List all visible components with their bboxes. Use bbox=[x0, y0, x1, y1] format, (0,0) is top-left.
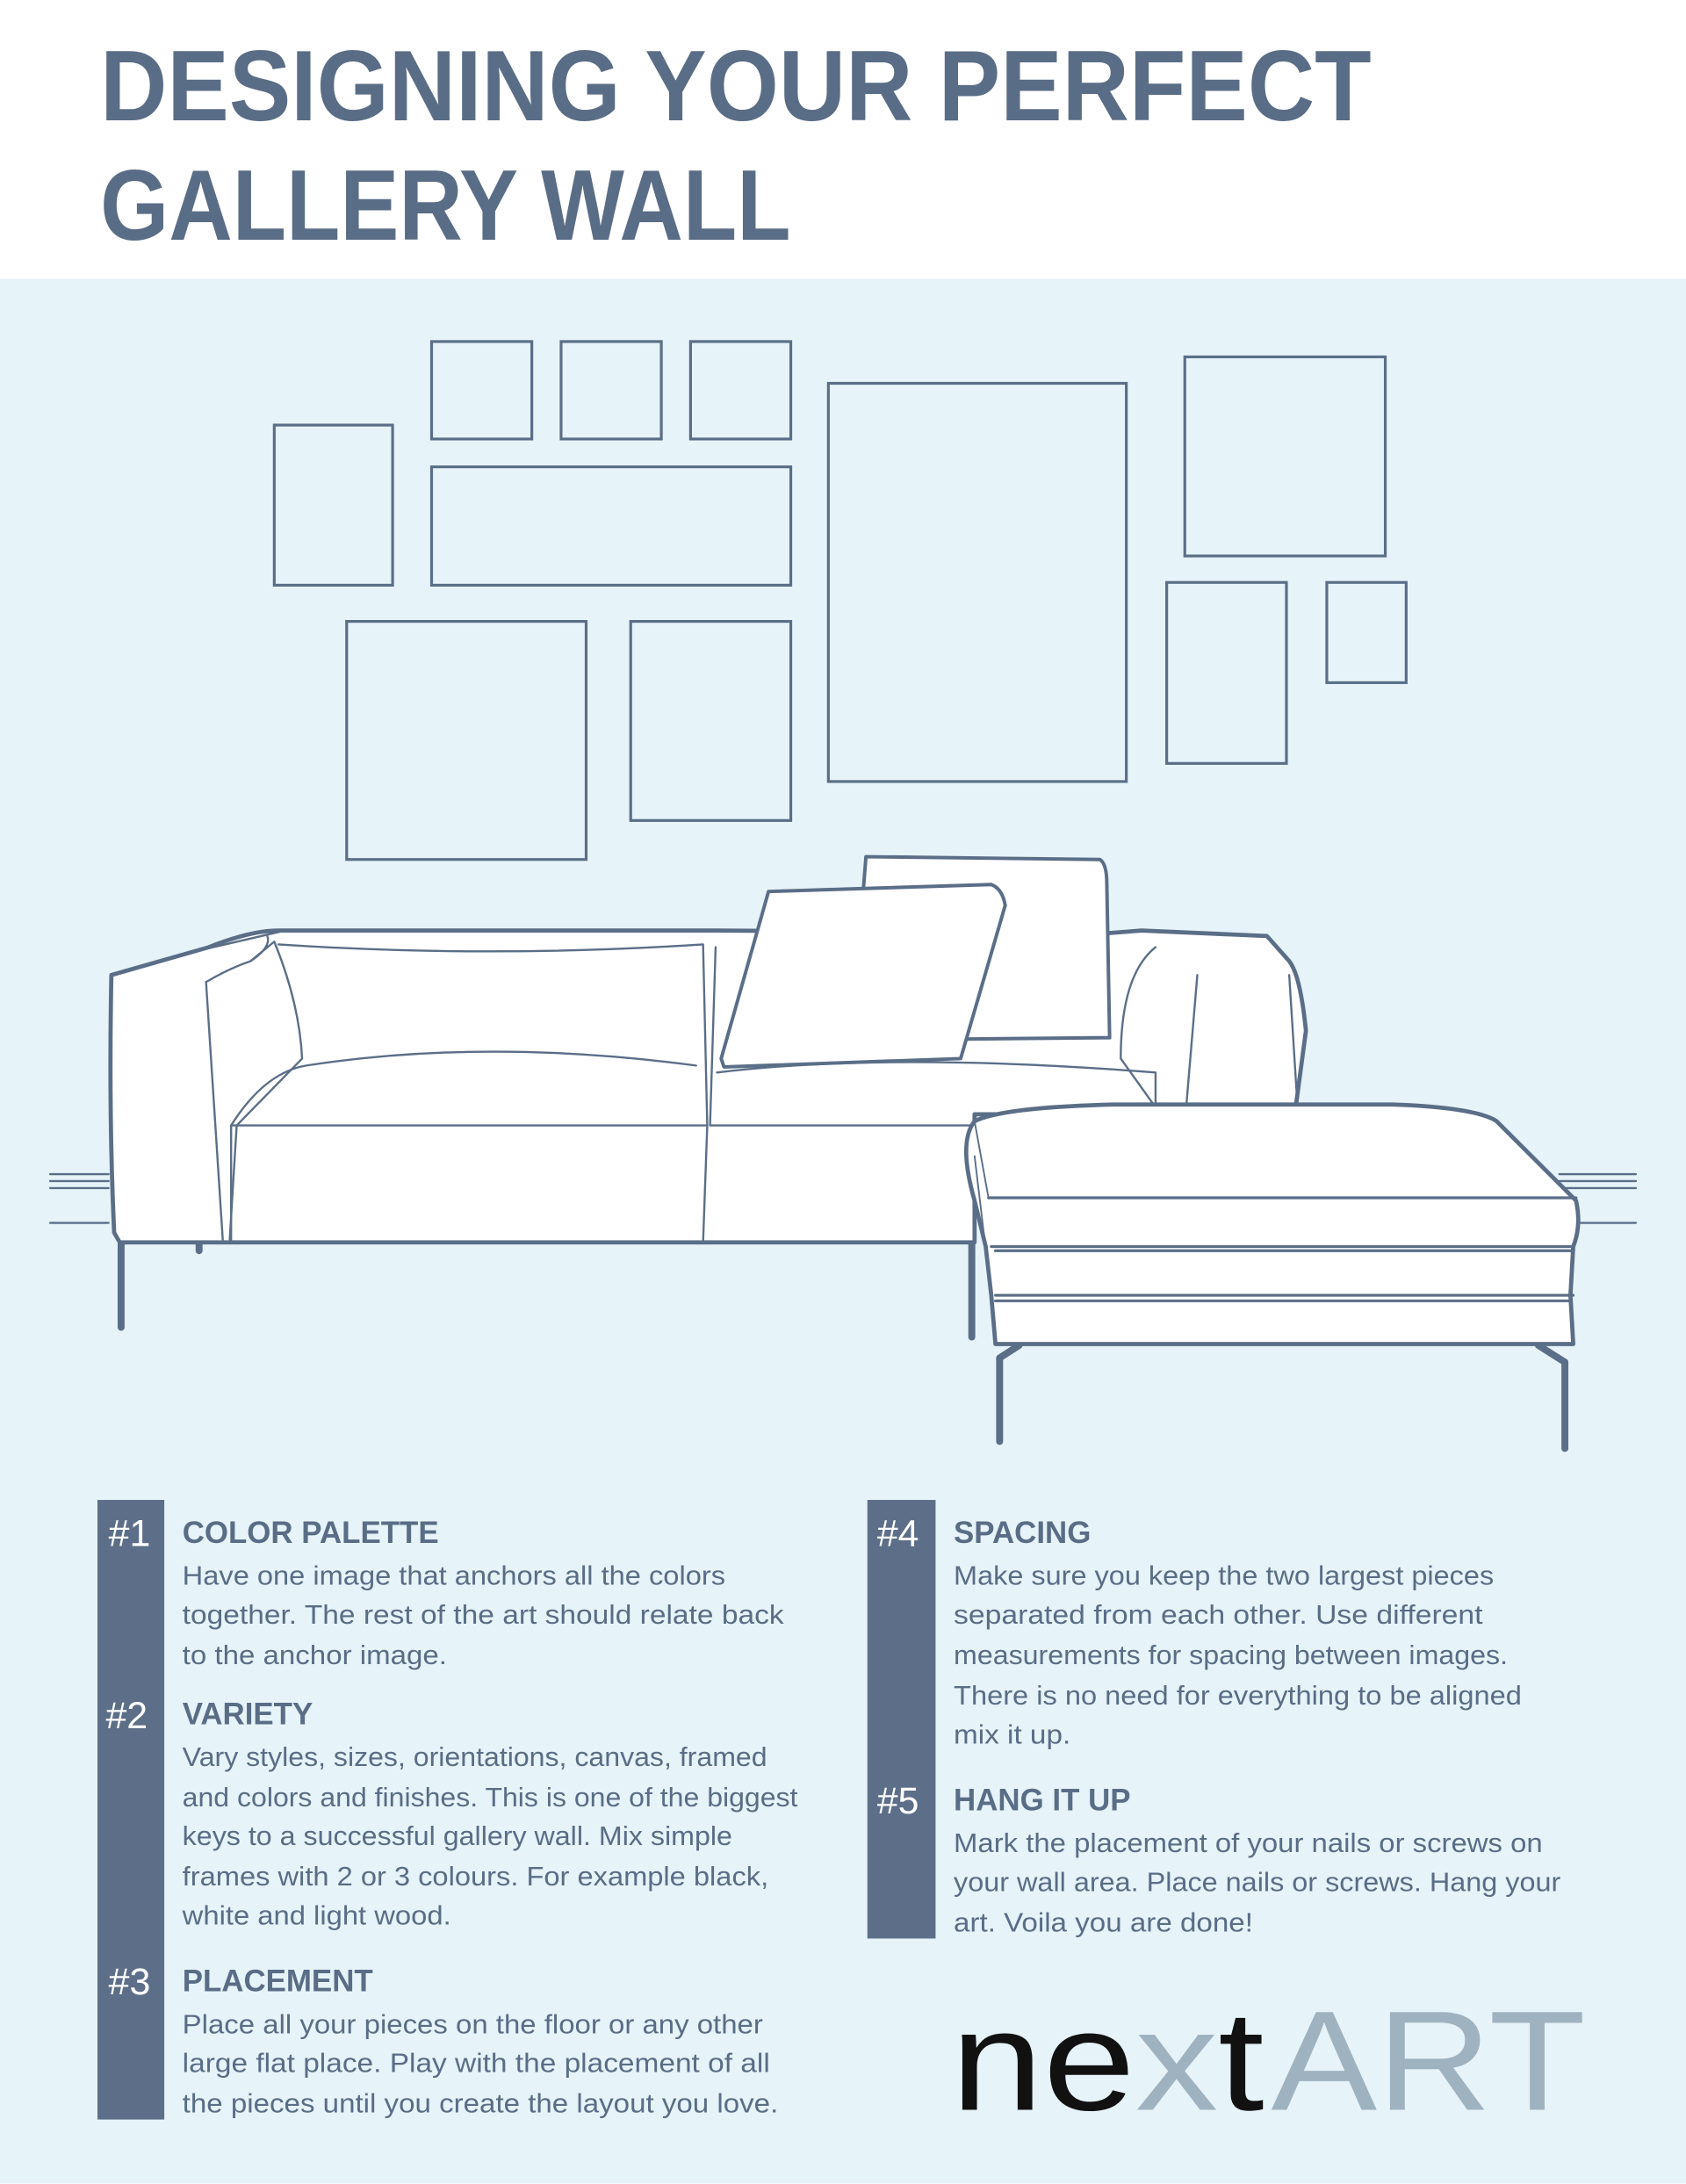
tip 3: placement: Place all your pieces on the floor or any other bbox=[183, 2010, 763, 2039]
tip 2: variety: Vary styles, sizes, orientations, canvas, framed bbox=[183, 1743, 767, 1772]
tip 3: placement bbox=[183, 1964, 778, 2119]
tip 1: color palette: to the anchor image. bbox=[183, 1641, 447, 1670]
back pillow bbox=[863, 857, 1110, 1039]
front pillow bbox=[721, 884, 1005, 1067]
tip 4: spacing: There is no need for everything to be aligned bbox=[954, 1682, 1522, 1711]
tip 1: color palette bbox=[183, 1516, 785, 1670]
tip 4: spacing: measurements for spacing between images. bbox=[954, 1641, 1508, 1670]
tip 4: spacing: separated from each other. Use different bbox=[954, 1601, 1483, 1630]
tip 5: hang it up bbox=[954, 1784, 1560, 1938]
right arm bbox=[1120, 948, 1298, 1107]
tip 5: hang it up: HANG IT UP bbox=[954, 1784, 1131, 1818]
tip numbers bbox=[105, 1512, 919, 2003]
tip 5: hang it up: art. Voila you are done! bbox=[954, 1909, 1253, 1938]
title bbox=[100, 31, 1372, 262]
logo: nextART: ne xt bbox=[951, 1982, 1264, 2140]
tip numbers: #4 bbox=[877, 1512, 919, 1554]
left arm bbox=[206, 936, 302, 1240]
tip 3: placement: PLACEMENT bbox=[183, 1964, 373, 1999]
tip 2: variety bbox=[182, 1697, 798, 1931]
logo: nextART bbox=[951, 1982, 1586, 2140]
tip 1: color palette: together. The rest of the art should relate back bbox=[183, 1601, 785, 1630]
tip 1: color palette: COLOR PALETTE bbox=[183, 1516, 439, 1550]
sofa legs bbox=[121, 1243, 972, 1337]
tip 2: variety: and colors and finishes. This is one of the biggest bbox=[183, 1784, 798, 1813]
seat cushions bbox=[231, 944, 707, 1126]
tip numbers: #1 bbox=[109, 1512, 150, 1554]
sofa illustration bbox=[50, 857, 1636, 1448]
tip bars bbox=[97, 1500, 164, 2120]
tip 5: hang it up: your wall area. Place nails or screws. Hang your bbox=[954, 1869, 1560, 1898]
title: GALLERY WALL bbox=[100, 150, 791, 262]
tip numbers: #2 bbox=[105, 1695, 148, 1737]
tip 3: placement: the pieces until you create the layout you love. bbox=[183, 2090, 778, 2119]
tip numbers: #3 bbox=[109, 1961, 150, 2003]
tip 4: spacing: SPACING bbox=[954, 1516, 1091, 1550]
tip 4: spacing: mix it up. bbox=[954, 1720, 1070, 1749]
tip 2: variety: keys to a successful gallery wall. Mix simple bbox=[183, 1822, 732, 1851]
title: DESIGNING YOUR PERFECT bbox=[100, 31, 1372, 142]
tip 2: variety: VARIETY bbox=[183, 1697, 313, 1731]
gallery frames bbox=[274, 342, 1406, 860]
tip 3: placement: large flat place. Play with the placement of all bbox=[183, 2050, 770, 2079]
wall lines bbox=[50, 1174, 1636, 1223]
tip 4: spacing bbox=[954, 1516, 1522, 1749]
tip 1: color palette: Have one image that anchors all the colors bbox=[183, 1562, 725, 1591]
tip 2: variety: frames with 2 or 3 colours. For example black, bbox=[183, 1863, 768, 1892]
logo: nextART: ART bbox=[1272, 1982, 1586, 2140]
tip numbers: #5 bbox=[877, 1780, 919, 1822]
tip 5: hang it up: Mark the placement of your nails or screws on bbox=[954, 1829, 1543, 1858]
tip 4: spacing: Make sure you keep the two largest pieces bbox=[954, 1562, 1494, 1591]
sofa back & body bbox=[111, 931, 1306, 1243]
ottoman legs bbox=[999, 1345, 1565, 1448]
tip 2: variety: white and light wood. bbox=[182, 1902, 451, 1931]
ottoman bbox=[966, 1105, 1578, 1344]
